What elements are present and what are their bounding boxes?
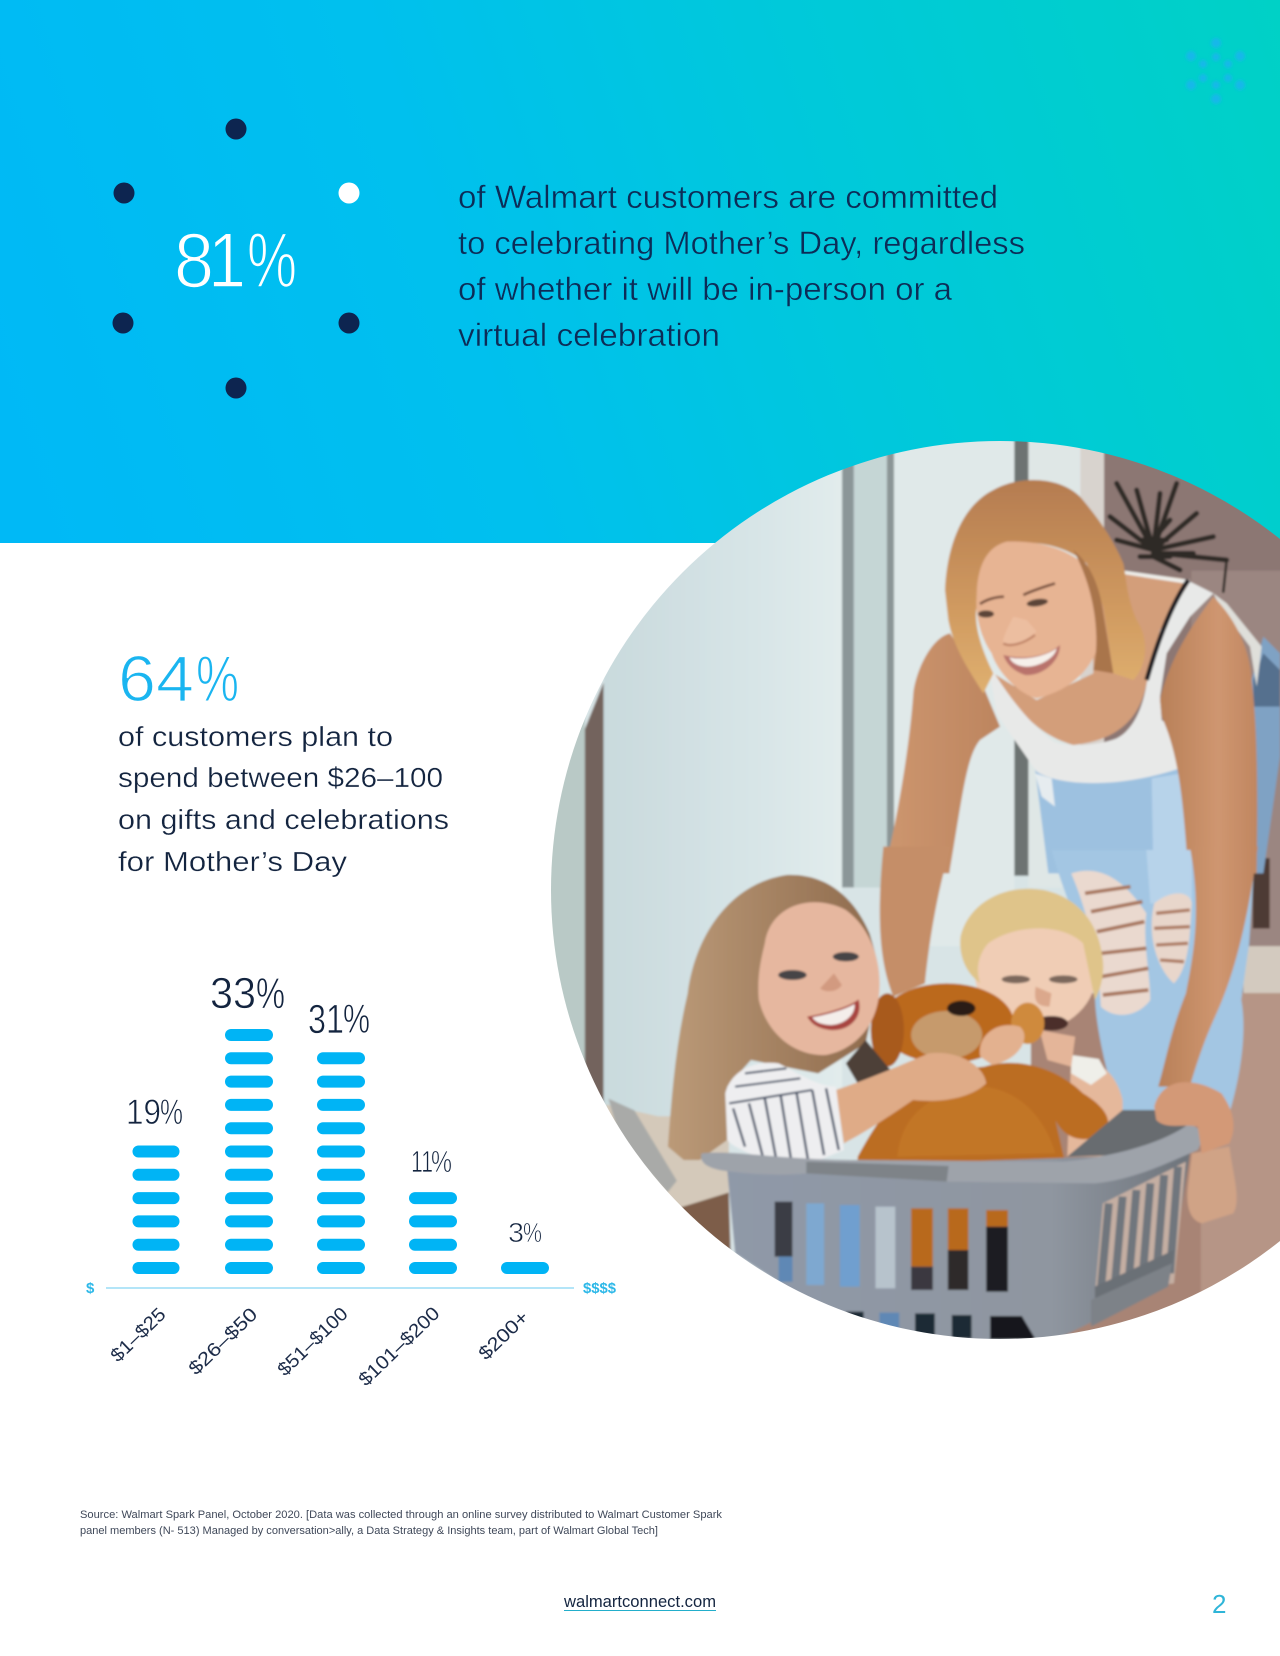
category labels [107,1303,533,1391]
foot [1187,1147,1237,1223]
page number: 2 [1212,1589,1226,1619]
right arm [1160,597,1257,873]
left arm [884,633,1000,873]
girl arm [836,1053,986,1143]
photo: mother pushing two children in a laundry basket [531,418,1280,1368]
room background [531,418,1280,1368]
text block: 81 percent description: virtual celebration [458,317,720,353]
source note: Source: Walmart Spark Panel, October 2020. [Data was collected through an online survey distributed to Walmart Customer Spark [80,1509,722,1521]
text block: 81 percent description: of whether it will be in-person or a [458,271,952,307]
category labels: $51–$100 [274,1304,352,1381]
basket body [727,1153,1190,1340]
jeans lower [1051,850,1255,1113]
bars: $101–$200 [409,1192,457,1274]
value labels: 33 [210,969,256,1018]
background: gradient top band [0,0,1280,543]
stat: 64 percent: 64 [118,642,194,715]
plant [1110,483,1227,592]
girl [668,875,893,1160]
value labels [126,969,542,1248]
text block: 81 percent description: to celebrating Mother’s Day, regardless [458,225,1025,261]
value labels: % [431,1144,452,1179]
basket right side slots [1091,1162,1186,1327]
jeans far leg [1252,637,1280,873]
footer link: walmartconnect.com [563,1592,716,1611]
bar chart: spending ranges [86,969,617,1391]
stat ring: 81 percent with six dots: 8 [174,216,214,304]
category labels: $101–$200 [355,1303,444,1391]
axis line [106,1287,574,1289]
category labels: $200+ [475,1307,533,1365]
value labels: 19 [126,1093,161,1132]
shirt [988,582,1213,783]
bars: $200+ [501,1262,549,1274]
axis end labels: $$$$ [583,1280,617,1297]
value labels: 3 [508,1217,524,1248]
stat ring: 81 percent with six dots: % [247,216,297,304]
facial features [978,583,1060,675]
teddy bear [858,983,1108,1163]
text block: 64 percent description: spend between $26–100 [118,762,443,793]
text block: 64 percent description: for Mother’s Day [118,846,347,877]
value labels: % [343,996,370,1042]
basket interior [1067,1110,1194,1157]
icon: decorative dot burst [1186,38,1245,104]
value labels: % [160,1093,183,1132]
mother upper body [884,480,1280,873]
bars: $1–$25 [132,1146,180,1274]
source note [80,1509,722,1537]
source note: panel members (N- 513) Managed by conversation>ally, a Data Strategy & Insights team, part of Walmart Global Tech] [80,1525,658,1537]
text block: 81 percent description [458,179,1025,353]
stat: 64 percent: % [196,642,239,715]
stat: 64 percent [118,642,239,715]
chest [993,572,1190,745]
axis end labels [86,1280,617,1297]
value labels: 11 [411,1144,433,1179]
text block: 81 percent description: of Walmart customers are committed [458,179,998,215]
mother left forearm [880,847,951,997]
boy [960,889,1123,1157]
stat ring: 81 percent with six dots [112,118,360,398]
bars: $26–$50 [225,1029,273,1274]
face [976,541,1100,698]
ripped holes [1071,871,1192,1015]
value labels: % [523,1217,542,1248]
basket rim [701,1123,1206,1183]
striped shirt [725,1063,844,1170]
text block: 64 percent description: on gifts and celebrations [118,804,449,835]
bars: $51–$100 [317,1052,365,1274]
jeans [1035,765,1190,873]
text block: 64 percent description [118,721,449,877]
axis end labels: $ [86,1280,95,1297]
basket slots [775,1202,1036,1339]
category labels: $26–$50 [185,1304,262,1380]
hair [945,480,1145,693]
value labels: % [256,969,285,1018]
value labels: 31 [308,996,344,1042]
children, teddy and basket [668,847,1258,1340]
mother right forearm [1158,847,1258,1087]
category labels: $1–$25 [107,1304,170,1367]
text block: 64 percent description: of customers plan to [118,721,393,752]
mother hand on basket [1154,1082,1233,1153]
stat ring: 81 percent with six dots: 1 [208,216,246,304]
